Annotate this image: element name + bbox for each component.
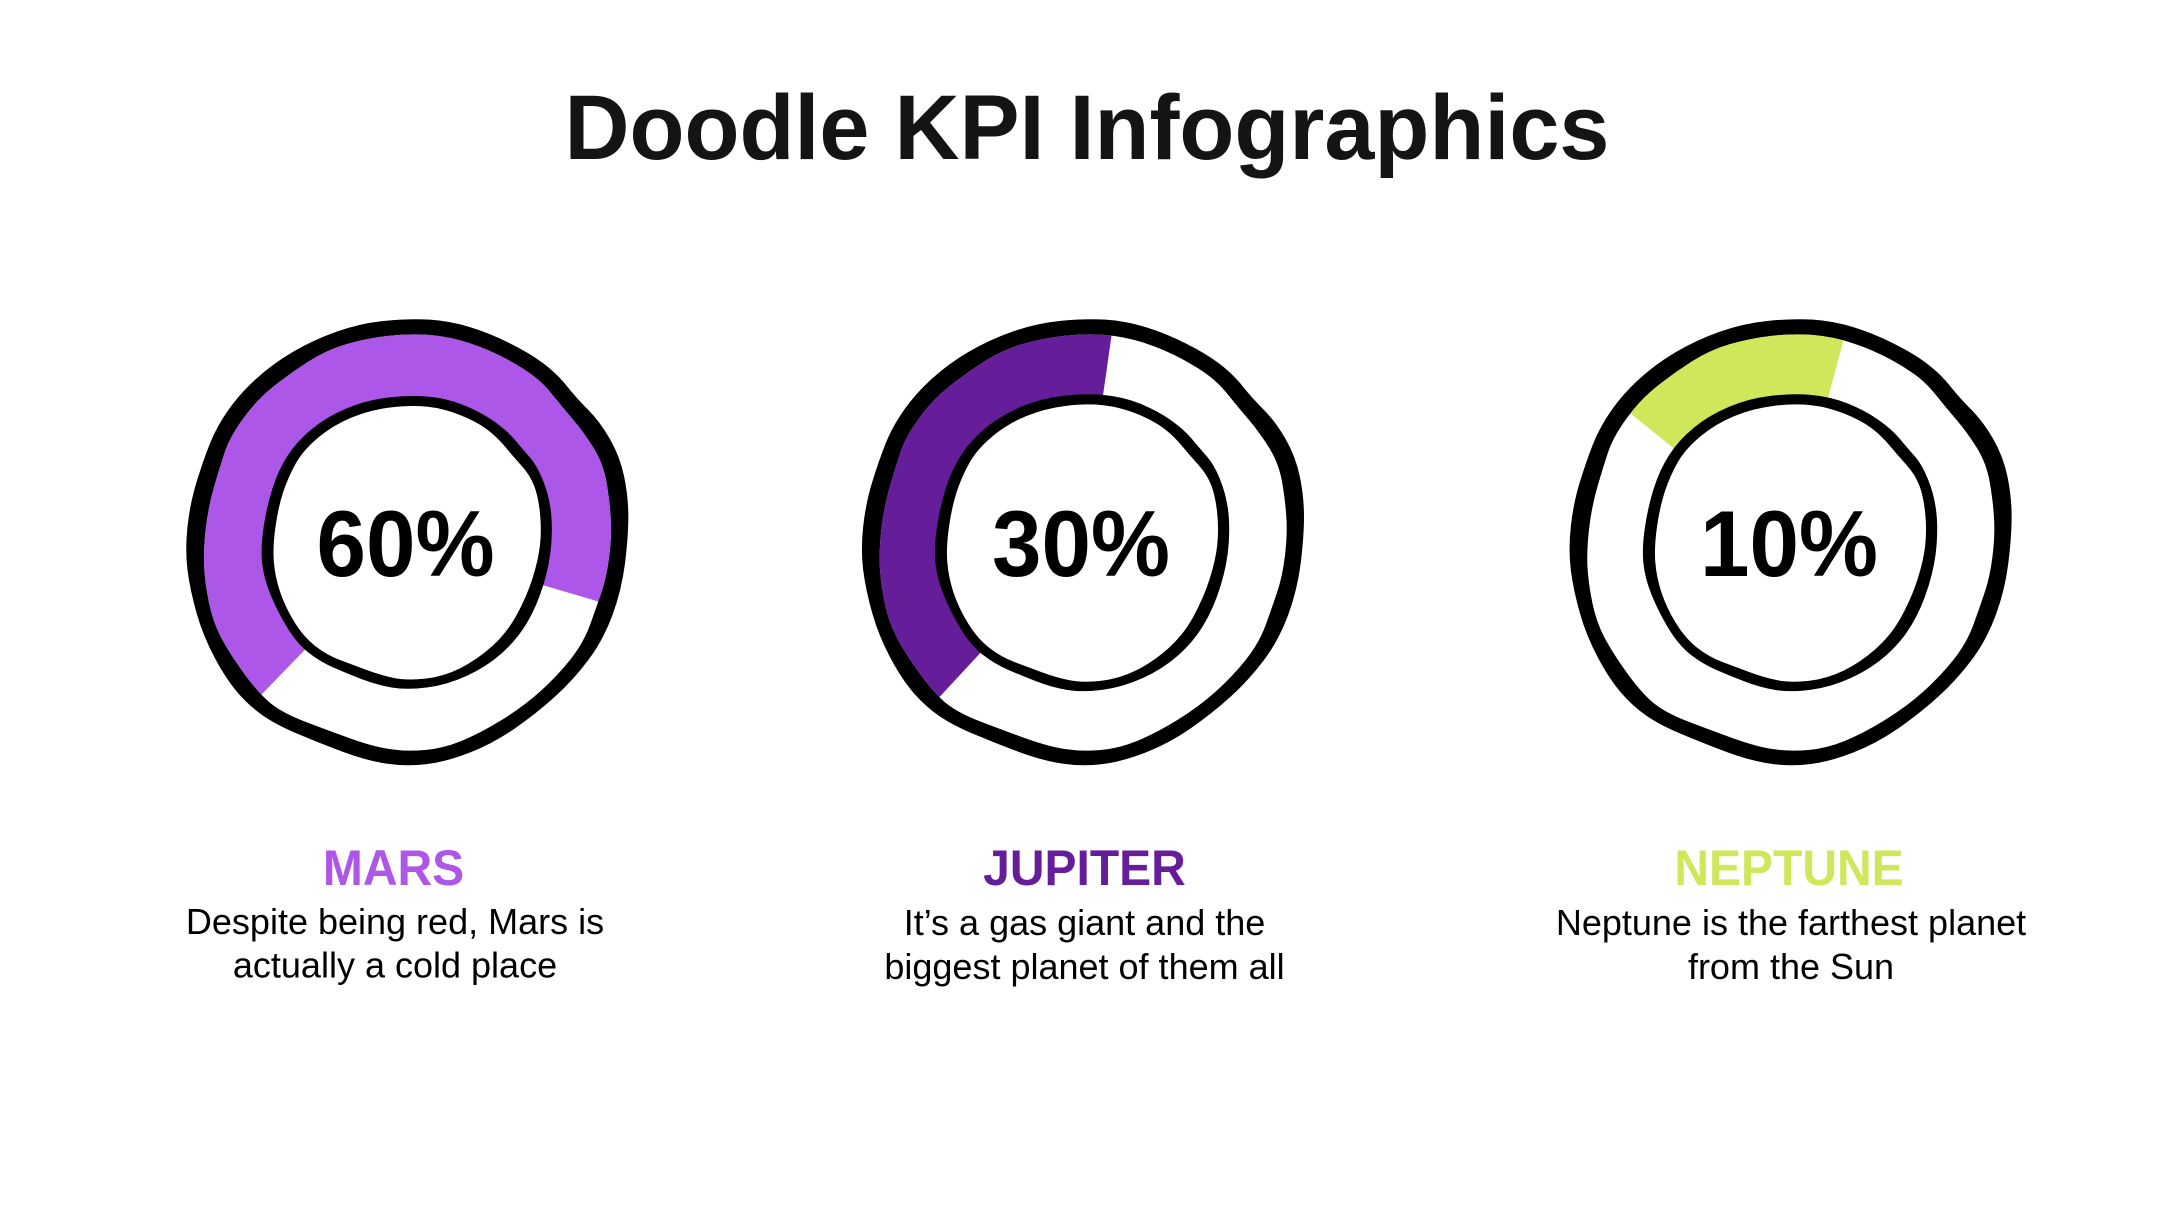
donut chart: Mars 60% [186, 319, 628, 766]
heading: Neptune: NEPTUNE [1674, 840, 1904, 896]
value: 60%: 60% [317, 492, 495, 596]
ring track: Mars [204, 334, 611, 751]
outer ring: Mars [186, 319, 628, 765]
title: Doodle KPI Infographics [565, 77, 1609, 179]
donut chart: Neptune 10% [1570, 319, 2012, 766]
description: Jupiter: It’s a gas giant and the [904, 902, 1265, 943]
description: Jupiter: biggest planet of them all [884, 946, 1285, 987]
heading: Mars: MARS [323, 840, 464, 896]
text block: Mars [186, 840, 604, 986]
text block: Neptune [1556, 840, 2026, 987]
description: Mars: actually a cold place [233, 944, 557, 986]
inner disc: Neptune [1655, 404, 1926, 682]
inner disc: Mars [273, 406, 541, 679]
progress segment: Mars [204, 334, 611, 694]
description: Neptune: from the Sun [1688, 946, 1894, 987]
value: 30%: 30% [992, 492, 1170, 596]
inner ring: Neptune [1643, 394, 1937, 691]
progress segment: Neptune [1630, 334, 1844, 448]
description: Mars: Despite being red, Mars is [186, 901, 604, 942]
inner ring: Mars [262, 396, 552, 689]
text block: Jupiter [884, 840, 1285, 987]
ring track: Jupiter [880, 334, 1287, 751]
donut chart: Jupiter 30% [862, 319, 1304, 766]
description: Neptune: Neptune is the farthest planet [1556, 902, 2026, 943]
outer ring: Neptune [1570, 319, 2012, 765]
inner disc: Jupiter [947, 404, 1218, 682]
inner ring: Jupiter [935, 394, 1229, 691]
heading: Jupiter: JUPITER [983, 840, 1186, 896]
ring track: Neptune [1587, 334, 1994, 751]
value: 10%: 10% [1700, 492, 1878, 596]
progress segment: Jupiter [880, 334, 1112, 697]
outer ring: Jupiter [862, 319, 1304, 765]
